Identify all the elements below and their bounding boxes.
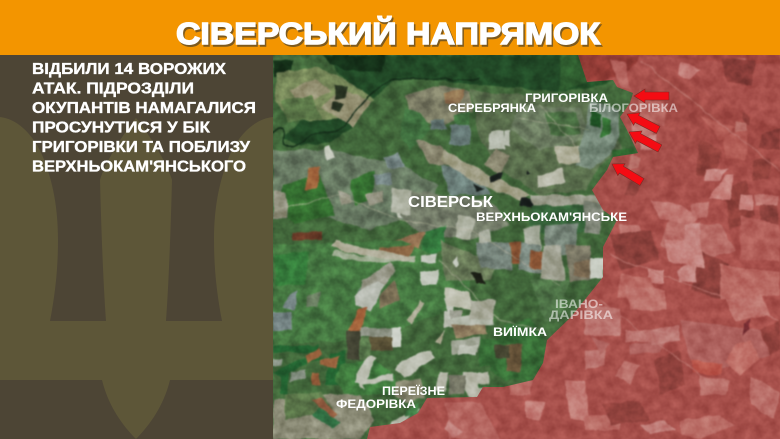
text block: attack summary: ПРОСУНУТИСЯ У БІК <box>32 119 211 136</box>
Siversk urban <box>400 190 510 240</box>
text block: attack summary <box>32 61 256 176</box>
arrow: attack 3 <box>626 126 663 155</box>
label: Fedorivka: ФЕДОРІВКА <box>336 397 416 411</box>
mid centre fields <box>488 130 510 150</box>
label: Siversk: СІВЕРСЬК <box>408 194 493 211</box>
text block: attack summary: ВЕРХНЬОКАМ'ЯНСЬКОГО <box>32 158 246 176</box>
mid-left fields <box>273 150 440 230</box>
title: СІВЕРСЬКИЙ НАПРЯМОК <box>178 17 602 53</box>
label: Serebrianka: СЕРЕБРЯНКА <box>448 101 536 115</box>
label: Ivano-Darivka: ІВАНО- <box>555 297 603 311</box>
occupied territory <box>360 55 780 439</box>
icon: trident watermark <box>0 117 273 439</box>
arrow: attack 2 <box>624 108 661 136</box>
label: Hryhorivka: ГРИГОРІВКА <box>525 91 608 105</box>
label: Vyimka: ВИЇМКА <box>493 324 547 339</box>
text block: attack summary: ГРИГОРІВКИ ТА ПОБЛИЗУ <box>32 139 251 156</box>
NW tan-green fields <box>274 68 375 122</box>
title: СІВЕРСЬКИЙ НАПРЯМОК <box>176 15 600 51</box>
fields lower <box>273 240 470 345</box>
occupied area texture <box>360 55 780 439</box>
panel: left text background <box>0 55 273 439</box>
label: Bilohorivka: БІЛОГОРІВКА <box>589 101 678 115</box>
arrow: attack towards Bilohorivka <box>634 89 669 103</box>
header band <box>0 0 780 55</box>
label: Pereizne: ПЕРЕЇЗНЕ <box>382 383 445 398</box>
river and roads <box>273 78 480 146</box>
text block: attack summary: ВІДБИЛИ 14 ВОРОЖИХ <box>32 61 227 78</box>
label: Ivano-Darivka: ДАРІВКА <box>549 308 613 322</box>
map: satellite terrain <box>273 55 780 439</box>
map texture <box>273 55 634 439</box>
text block: attack summary: АТАК. ПІДРОЗДІЛИ <box>32 80 194 97</box>
label: Verkhnokamianske: ВЕРХНЬОКАМ'ЯНСЬКЕ <box>476 210 627 224</box>
label: Ivano-Darivka <box>549 297 613 322</box>
text block: attack summary: ОКУПАНТІВ НАМАГАЛИСЯ <box>32 100 256 117</box>
forest top band <box>282 55 600 146</box>
arrow: attack towards Verkhnokamianske <box>608 158 646 188</box>
